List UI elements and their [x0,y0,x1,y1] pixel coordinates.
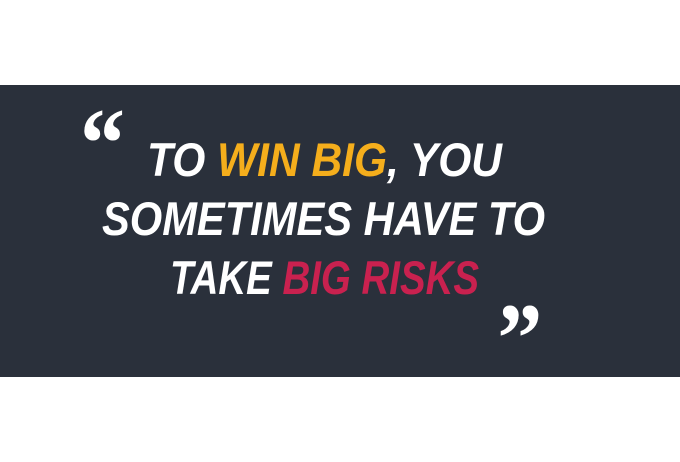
icon: opening quotation mark: “ [80,87,125,199]
icon: closing quotation mark: ” [497,283,542,394]
panel: dark quote banner [0,85,680,377]
quote line 1: TO WIN BIG, YOU [147,133,503,186]
quote line 2: SOMETIMES HAVE TO [102,192,545,245]
quote line 3: TAKE BIG RISKS [170,251,479,304]
